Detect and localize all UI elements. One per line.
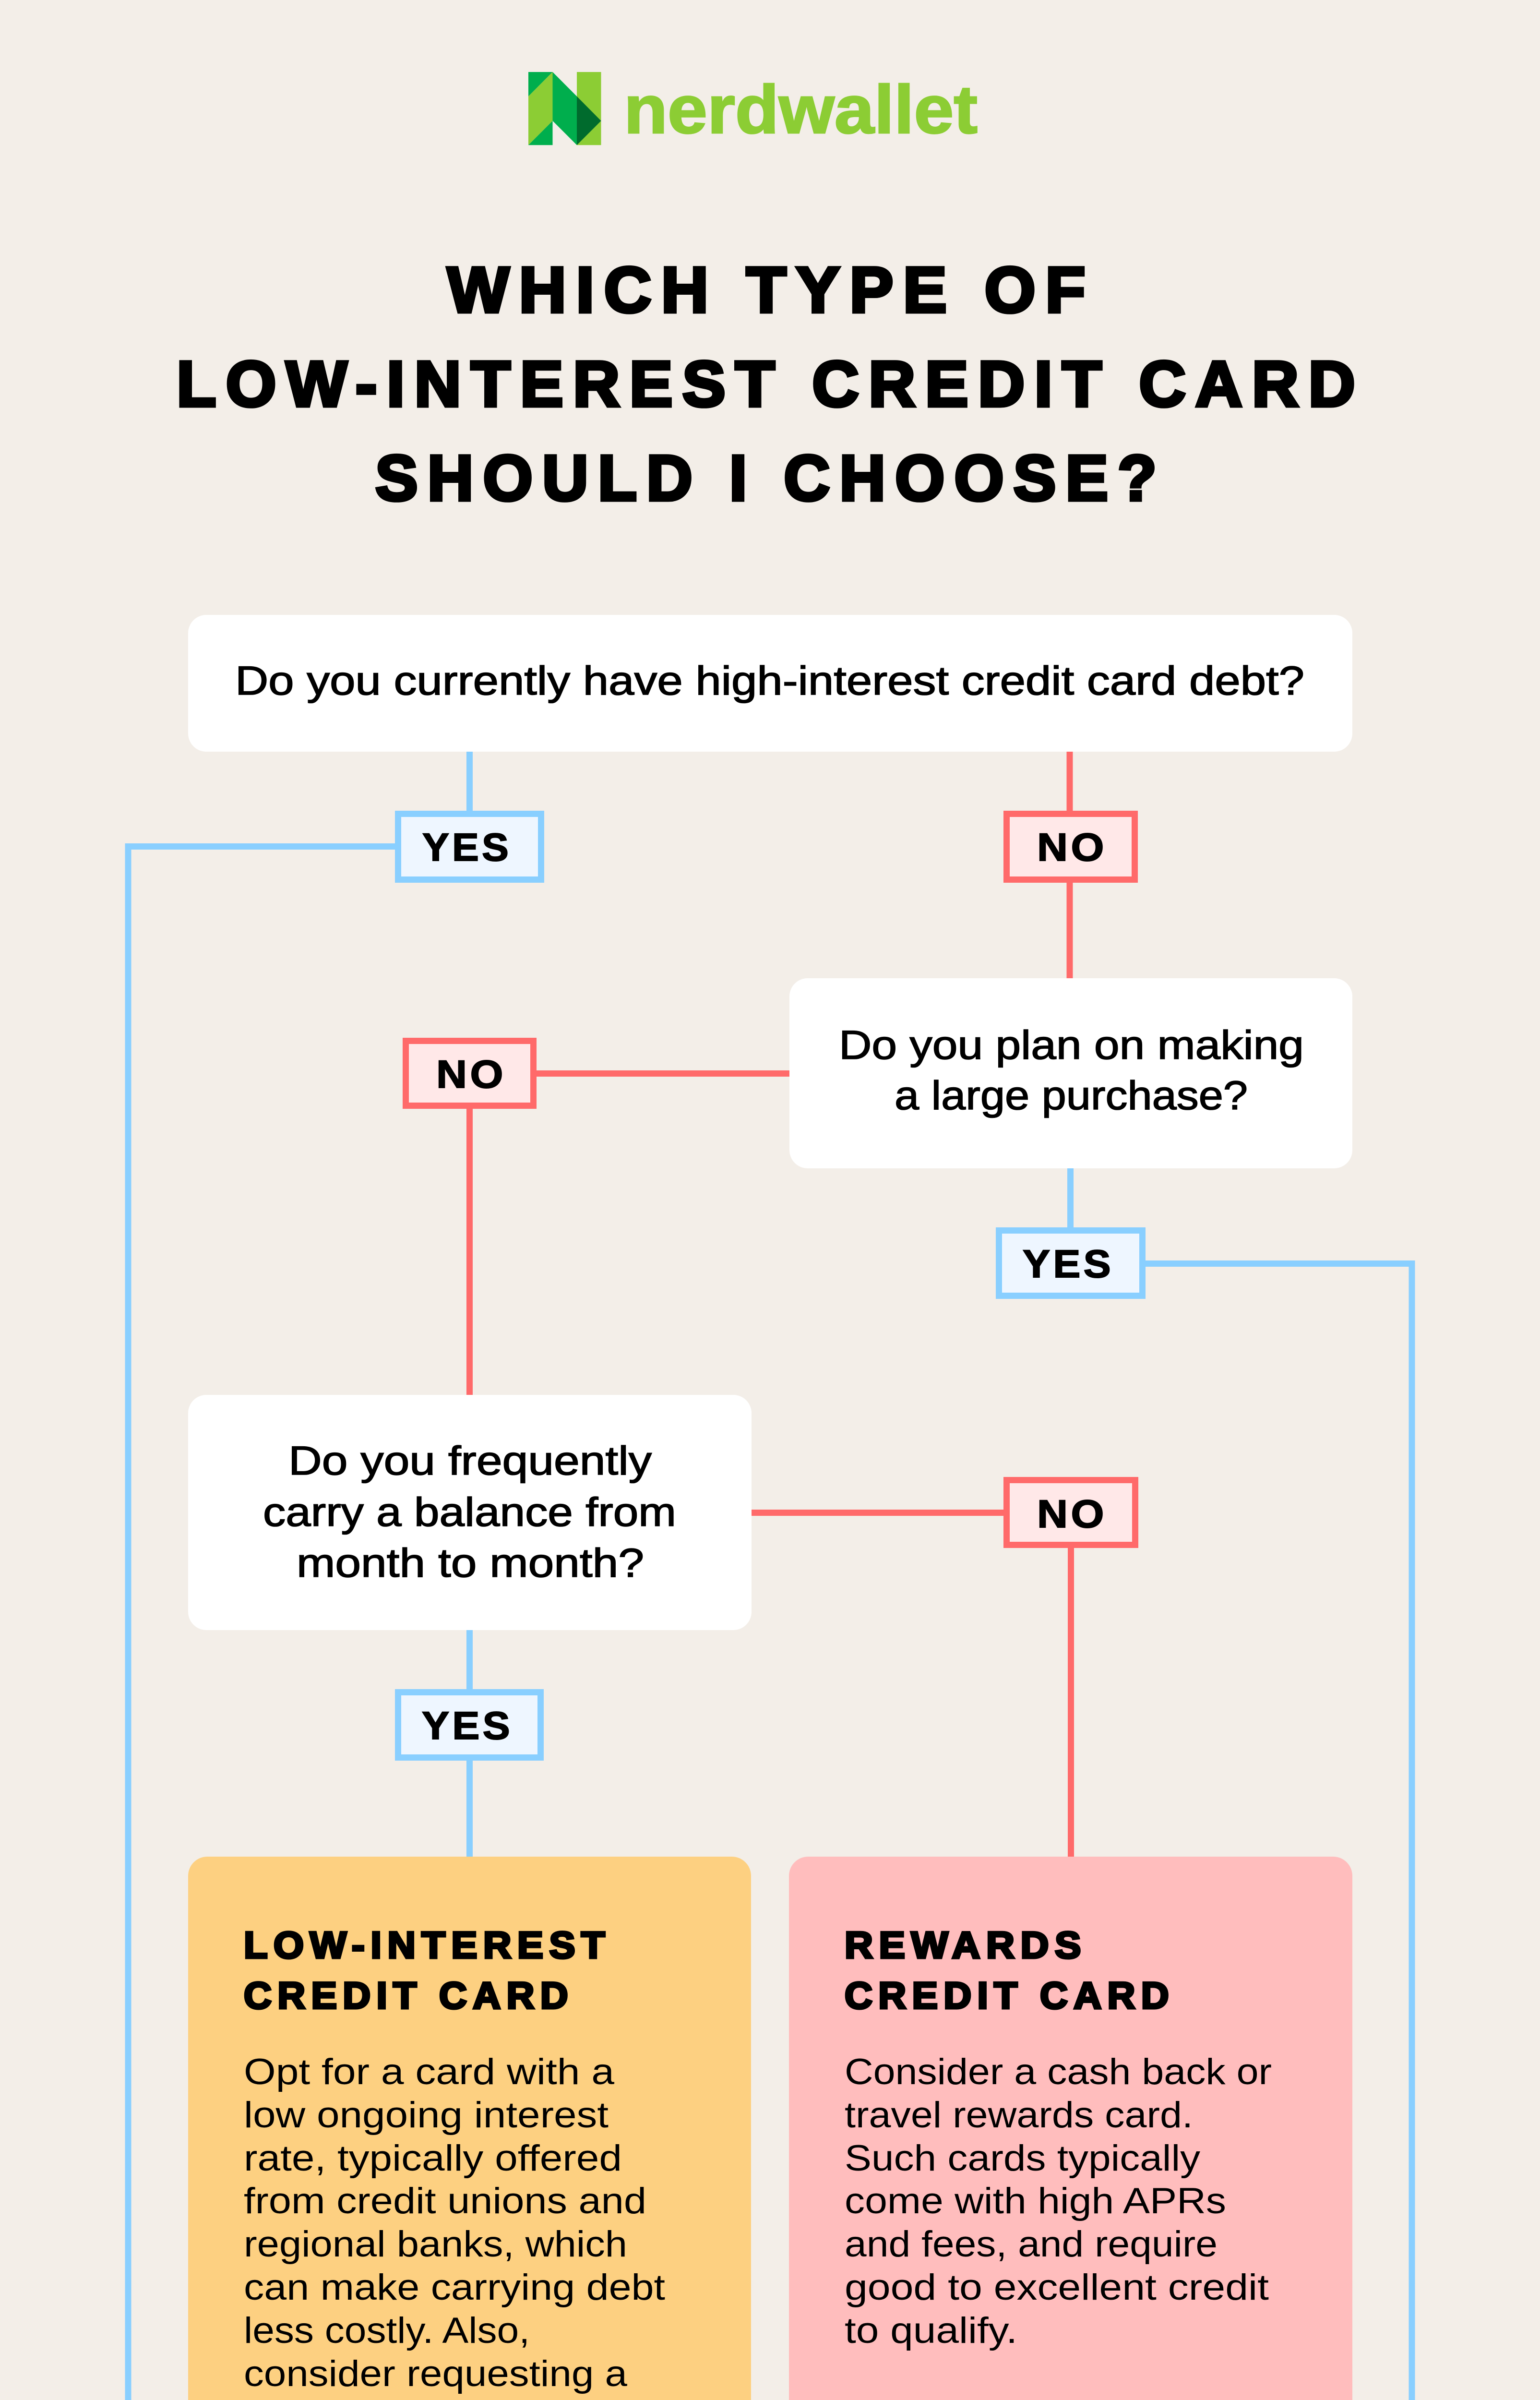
connector: third question no to rewards card [752, 1513, 1071, 1857]
text block: low-interest description: consider requesting a [244, 2353, 628, 2394]
label: no: NO [1037, 826, 1107, 869]
wordmark: nerdwallet [624, 72, 978, 148]
connector: second question no to third question [469, 1073, 789, 1395]
text block: low-interest description: from credit unions and [244, 2181, 646, 2221]
text block: rewards description: to qualify. [845, 2310, 1017, 2351]
text block: low-interest description: rate, typically offered [244, 2138, 622, 2179]
label: no: NO [1037, 1492, 1107, 1536]
connector: third question yes to low-interest card [466, 1630, 473, 1857]
title: SHOULD I CHOOSE? [375, 443, 1166, 514]
text block: low-interest description: can make carrying debt [244, 2267, 665, 2308]
text block: low-interest description [244, 2052, 665, 2400]
question: carry a balance [188, 1395, 752, 1630]
text block: low-interest description: Opt for a card with a [244, 2052, 615, 2092]
text block: rewards description: Consider a cash back or [845, 2052, 1272, 2092]
question: carry a balance: Do you frequently [288, 1438, 652, 1483]
label: yes [398, 814, 541, 879]
label: no [1007, 1480, 1135, 1545]
heading: rewards credit card: REWARDS [845, 1924, 1087, 1966]
connector: first question yes to balance transfer card [128, 752, 469, 2400]
text block: low-interest description: less costly. Also, [244, 2310, 530, 2351]
label: no [1007, 814, 1134, 879]
text block: rewards description: good to excellent credit [845, 2267, 1269, 2308]
text block: rewards description: Such cards typically [845, 2138, 1200, 2179]
label: yes: YES [422, 826, 512, 869]
question: large purchase: Do you plan on making [839, 1022, 1304, 1068]
panel: rewards credit card [789, 1857, 1352, 2400]
heading: rewards credit card [845, 1924, 1175, 2016]
panel: low-interest credit card [188, 1857, 751, 2400]
question: large purchase: a large purchase? [895, 1073, 1248, 1118]
heading: low-interest credit card: LOW-INTEREST [244, 1924, 611, 1966]
question: carry a balance: month to month? [297, 1540, 644, 1585]
label: yes: YES [422, 1704, 513, 1748]
question: large purchase [789, 978, 1352, 1168]
heading: low-interest credit card: CREDIT CARD [244, 1974, 574, 2016]
text block: rewards description: come with high APRs [845, 2181, 1226, 2221]
label: yes: YES [1023, 1242, 1114, 1286]
question: high-interest debt: Do you currently have high-interest credit card debt? [235, 658, 1304, 703]
logo: NerdWallet [528, 72, 978, 148]
title: LOW-INTEREST CREDIT CARD [177, 348, 1365, 420]
text block: rewards description [845, 2052, 1272, 2351]
label: yes [999, 1231, 1142, 1296]
heading: rewards credit card: CREDIT CARD [845, 1974, 1175, 2016]
label: yes [398, 1692, 540, 1758]
question: carry a balance: carry a balance from [263, 1489, 676, 1535]
connector: second question yes to intro APR card [1070, 1168, 1412, 2400]
heading: low-interest credit card [244, 1924, 611, 2016]
title [177, 254, 1365, 514]
title: WHICH TYPE OF [447, 254, 1095, 326]
connector: first question no to second question [1066, 752, 1073, 978]
label: no [406, 1041, 534, 1106]
text block: rewards description: and fees, and require [845, 2224, 1218, 2265]
text block: low-interest description: low ongoing interest [244, 2095, 609, 2136]
label: no: NO [436, 1053, 506, 1096]
text block: low-interest description: regional banks, which [244, 2224, 627, 2265]
question: high-interest debt [188, 615, 1352, 752]
text block: rewards description: travel rewards card. [845, 2095, 1193, 2136]
icon: NerdWallet N mark [528, 72, 601, 145]
